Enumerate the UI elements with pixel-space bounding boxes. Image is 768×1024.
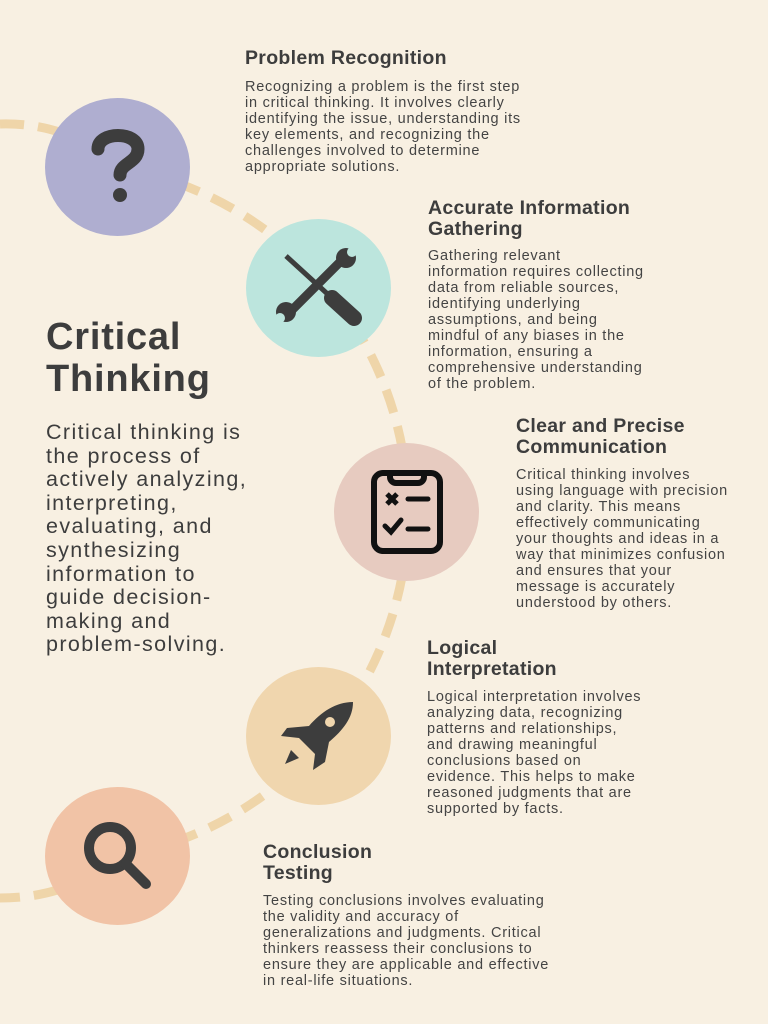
icon circle: rocket	[246, 667, 391, 805]
step 1 text: Problem Recognition	[245, 47, 447, 69]
step 1 text	[245, 47, 521, 175]
step 4 text: and drawing meaningful	[427, 737, 597, 753]
step 4 text: Logical	[427, 637, 497, 659]
intro text: information to	[46, 562, 196, 586]
step 3 text: your thoughts and ideas in a	[516, 531, 719, 547]
title	[46, 316, 211, 400]
icon circle: magnifier	[45, 787, 190, 925]
step 4 text: supported by facts.	[427, 801, 564, 817]
step 3 text: and clarity. This means	[516, 499, 681, 515]
step 4 text: reasoned judgments that are	[427, 785, 632, 801]
step 3 text: Clear and Precise	[516, 415, 685, 437]
step 2 text: Gathering relevant	[428, 248, 561, 264]
step 5 text: the validity and accuracy of	[263, 909, 459, 925]
step 4 text: analyzing data, recognizing	[427, 705, 623, 721]
intro text: actively analyzing,	[46, 467, 247, 491]
step 2 text: mindful of any biases in the	[428, 328, 625, 344]
step 2 text: information requires collecting	[428, 264, 644, 280]
icon circle: clipboard	[334, 443, 479, 581]
step 2 text: comprehensive understanding	[428, 360, 643, 376]
icon circle: tools	[246, 219, 391, 357]
step 4 text: Logical interpretation involves	[427, 689, 641, 705]
step 4 text: evidence. This helps to make	[427, 769, 636, 785]
step 5 text: in real-life situations.	[263, 973, 413, 989]
step 1 text: identifying the issue, understanding its	[245, 111, 521, 127]
step 3 text: way that minimizes confusion	[516, 547, 726, 563]
step 1 text: Recognizing a problem is the first step	[245, 79, 520, 95]
step 3 text: and ensures that your	[516, 563, 672, 579]
step 4 text	[427, 637, 641, 817]
step 5 text: ensure they are applicable and effective	[263, 957, 549, 973]
step 5 text: Testing	[263, 862, 333, 884]
intro text: Critical thinking is	[46, 420, 241, 444]
step 3 text: using language with precision	[516, 483, 728, 499]
step 3 text: effectively communicating	[516, 515, 701, 531]
step 3 text: message is accurately	[516, 579, 675, 595]
step 3 text: understood by others.	[516, 595, 672, 611]
step 2 text: data from reliable sources,	[428, 280, 619, 296]
step 4 text: Interpretation	[427, 658, 557, 680]
title: Critical	[46, 316, 181, 358]
step 2 text: information, ensuring a	[428, 344, 593, 360]
step 5 text: generalizations and judgments. Critical	[263, 925, 541, 941]
intro text: the process of	[46, 444, 201, 468]
step 5 text: Conclusion	[263, 841, 372, 863]
intro text: problem-solving.	[46, 632, 226, 656]
step 3 text: Communication	[516, 436, 667, 458]
step 5 text: Testing conclusions involves evaluating	[263, 893, 545, 909]
step 5 text	[263, 841, 549, 989]
step 4 text: patterns and relationships,	[427, 721, 617, 737]
step 5 text: thinkers reassess their conclusions to	[263, 941, 532, 957]
intro text: interpreting,	[46, 491, 178, 515]
step 3 text: Critical thinking involves	[516, 467, 690, 483]
step 3 text	[516, 415, 728, 611]
intro text	[46, 420, 247, 656]
step 2 text: Accurate Information	[428, 197, 630, 219]
step 2 text: assumptions, and being	[428, 312, 598, 328]
intro text: making and	[46, 609, 171, 633]
intro text: guide decision-	[46, 585, 212, 609]
step 1 text: in critical thinking. It involves clearly	[245, 95, 505, 111]
step 1 text: key elements, and recognizing the	[245, 127, 490, 143]
step 1 text: appropriate solutions.	[245, 159, 400, 175]
title: Thinking	[46, 358, 211, 400]
intro text: synthesizing	[46, 538, 181, 562]
step 2 text: identifying underlying	[428, 296, 581, 312]
step 1 text: challenges involved to determine	[245, 143, 480, 159]
intro text: evaluating, and	[46, 514, 213, 538]
step 2 text	[428, 197, 644, 392]
step 2 text: Gathering	[428, 218, 523, 240]
step 4 text: conclusions based on	[427, 753, 581, 769]
icon circle: question	[45, 98, 190, 236]
step 2 text: of the problem.	[428, 376, 536, 392]
